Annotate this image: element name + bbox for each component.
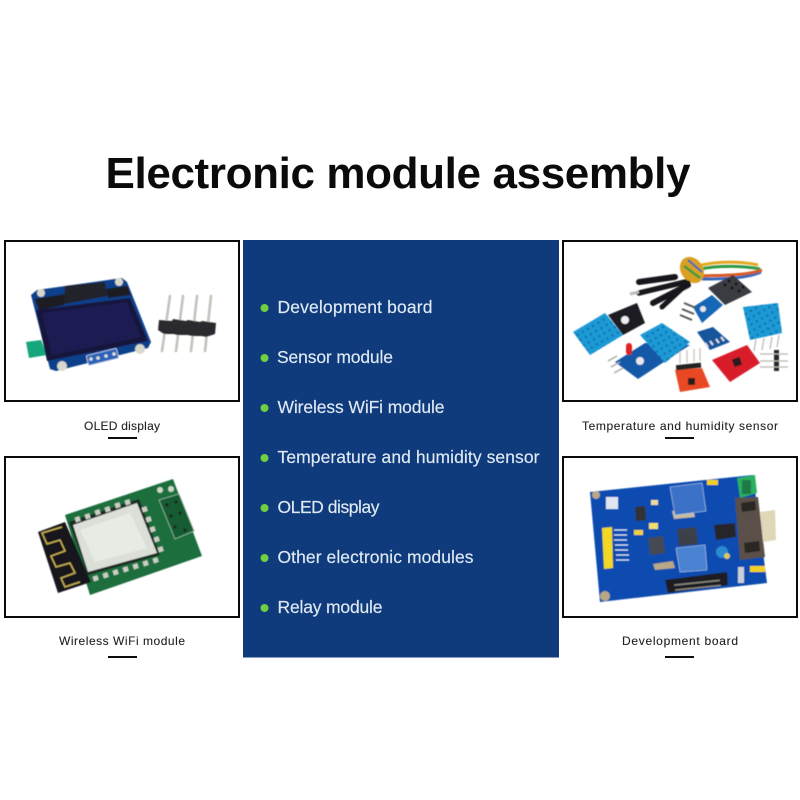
caption: temperature and humidity sensor: Temperature and humidity sensor [582,419,778,433]
wires and connectors [630,252,762,307]
right pin header [774,350,779,371]
list item: other electronic modules: Other electronic modules [278,547,474,567]
blue sensor large left [573,313,623,355]
caption: wireless wifi module: Wireless WiFi module [59,634,185,648]
red module [712,345,760,382]
list item: sensor module: Sensor module [277,347,393,367]
caption: development board: Development board [622,634,738,648]
caption: oled display: OLED display [84,419,160,433]
list item: development board: Development board [278,297,432,317]
list item: oled display: OLED display [278,497,380,517]
panel: oled display [5,241,239,401]
list item: relay module: Relay module [278,597,382,617]
list item: temperature and humidity sensor: Temperature and humidity sensor [278,447,540,467]
orange module [675,368,710,392]
icon: oled module photo [26,278,151,371]
icon: wifi module photo [38,479,202,595]
top sensor module [693,295,723,323]
blue sensor module middle [615,343,690,379]
icon: pin header [158,296,216,351]
panel: temperature and humidity sensor [563,241,797,401]
small blue module [697,327,730,350]
icon: sensor kit photo [573,252,788,392]
panel: module list [243,240,559,658]
list item: wireless wifi module: Wireless WiFi module [278,397,444,417]
caption: development board [622,634,738,658]
panel: wireless wifi module [5,457,239,617]
caption: wireless wifi module [59,634,185,658]
title: Electronic module assembly [106,149,691,198]
right blue sensor [743,303,782,340]
panel: development board [563,457,797,617]
icon: development board photo [590,475,776,602]
